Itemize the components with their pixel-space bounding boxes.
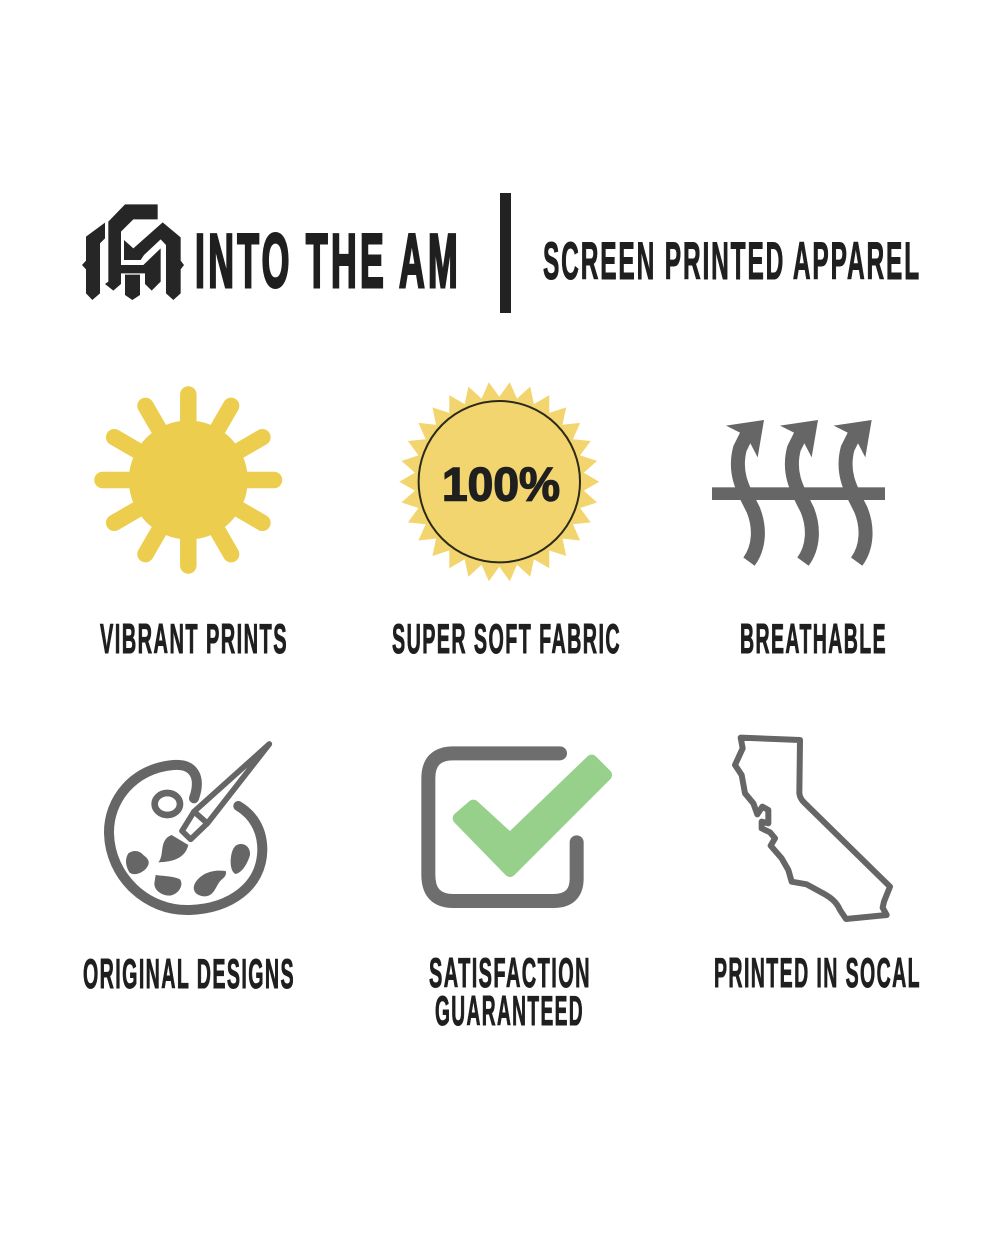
infographic canvas: VIBRANT PRINTS (100, 615, 288, 662)
icon: paint palette and brush (109, 744, 269, 910)
panel: satisfaction guaranteed: SATISFACTION (429, 949, 591, 996)
panel: vibrant prints (100, 394, 288, 662)
icon: 100% seal (399, 382, 599, 581)
panel: satisfaction guaranteed: GUARANTEED (435, 987, 584, 1034)
label (429, 949, 591, 1034)
panel: satisfaction guaranteed (428, 753, 606, 1034)
vertical divider (500, 193, 511, 313)
panel: original designs (83, 744, 295, 997)
panel: breathable (712, 420, 887, 662)
infographic canvas: ORIGINAL DESIGNS (83, 950, 295, 997)
seal ring (419, 401, 580, 562)
icon: brand monogram logo (82, 204, 184, 300)
icon: California outline (735, 738, 890, 919)
infographic canvas: SUPER SOFT FABRIC (392, 615, 621, 662)
header: INTO THE AM (195, 219, 461, 304)
icon: sun (102, 394, 274, 566)
header (82, 193, 921, 313)
icon: fabric with rising arrows (712, 420, 885, 562)
seal text: 100% (442, 458, 560, 510)
icon: green check in box (428, 753, 606, 901)
panel: printed in socal (714, 738, 921, 996)
seal starburst (399, 382, 599, 581)
panel: super soft fabric (392, 382, 621, 662)
